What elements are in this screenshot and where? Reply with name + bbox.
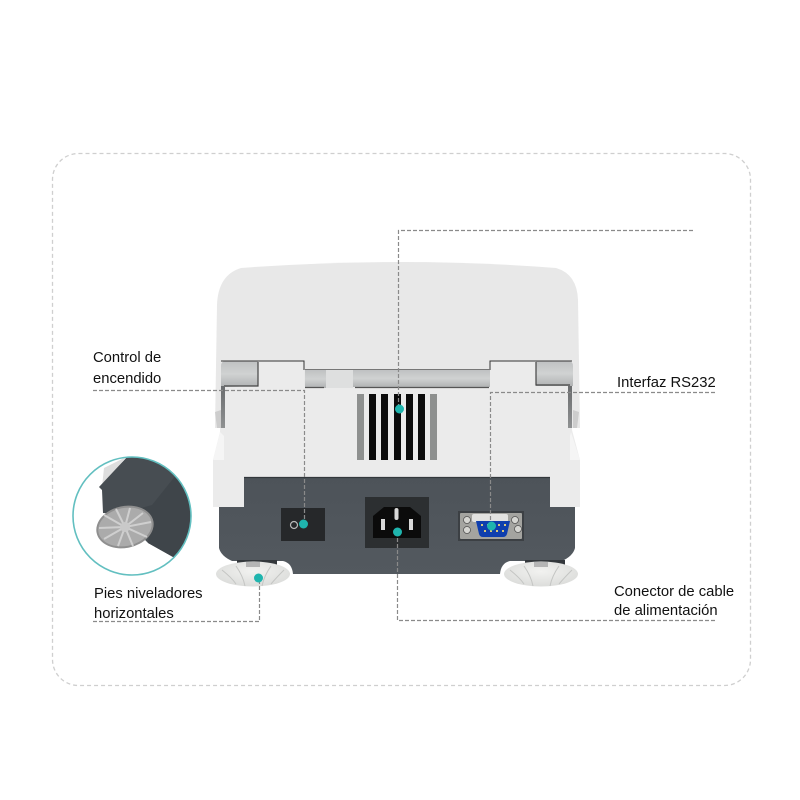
label: power switch: Control de — [93, 350, 161, 366]
inset: levelling foot detail — [73, 456, 195, 585]
label: RS232: Interfaz RS232 — [617, 375, 716, 391]
hinge right — [490, 361, 573, 388]
lid — [215, 262, 580, 428]
right foot — [504, 560, 578, 586]
label: power cable connector: Conector de cable — [614, 584, 734, 600]
label: levelling feet: Pies niveladores — [94, 586, 203, 602]
side strips — [221, 386, 225, 428]
label: levelling feet: horizontales — [94, 606, 174, 622]
centre hinge bar — [305, 370, 490, 388]
callout line: levelling feet — [93, 578, 260, 622]
callout line: power cable — [398, 532, 716, 620]
RS232 connector — [458, 511, 524, 541]
dark base — [219, 477, 575, 574]
power switch — [281, 508, 325, 541]
hinge left — [221, 361, 304, 388]
device: rear view — [213, 262, 580, 586]
callout line: RS232 — [490, 392, 715, 526]
vents — [357, 394, 437, 460]
label: power cable connector: de alimentación — [614, 603, 718, 619]
callout line: power switch — [93, 390, 304, 524]
left foot — [216, 560, 290, 586]
power socket — [365, 497, 429, 548]
callout line: top vent label — [398, 230, 693, 409]
marker dots — [254, 404, 496, 582]
label: power switch: encendido — [93, 371, 161, 387]
panel: dashed outline — [52, 154, 750, 686]
body upper — [213, 386, 580, 507]
